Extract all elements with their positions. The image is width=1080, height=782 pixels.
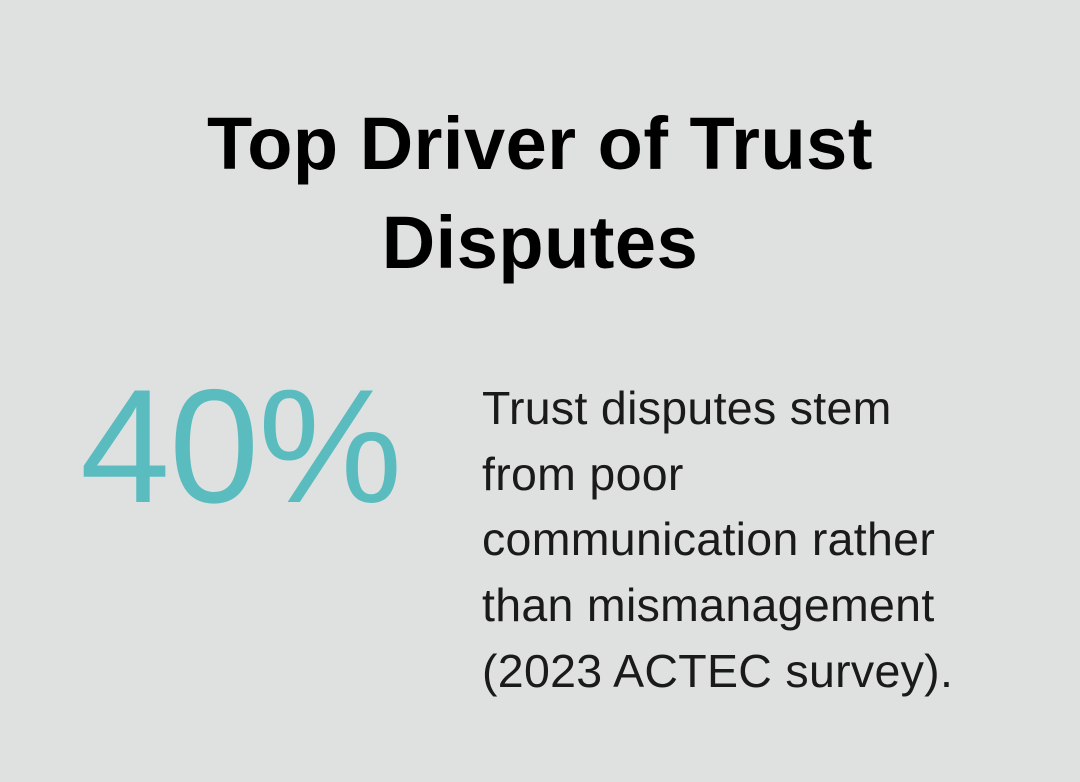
description text bbox=[482, 382, 953, 697]
description text: (2023 ACTEC survey). bbox=[482, 645, 953, 697]
description text: Trust disputes stem bbox=[482, 382, 892, 434]
title bbox=[207, 102, 873, 284]
big statistic: 40% bbox=[80, 356, 401, 537]
title: Disputes bbox=[382, 201, 698, 284]
description text: communication rather bbox=[482, 513, 935, 565]
title: Top Driver of Trust bbox=[207, 102, 873, 185]
description text: from poor bbox=[482, 448, 684, 500]
description text: than mismanagement bbox=[482, 579, 935, 631]
